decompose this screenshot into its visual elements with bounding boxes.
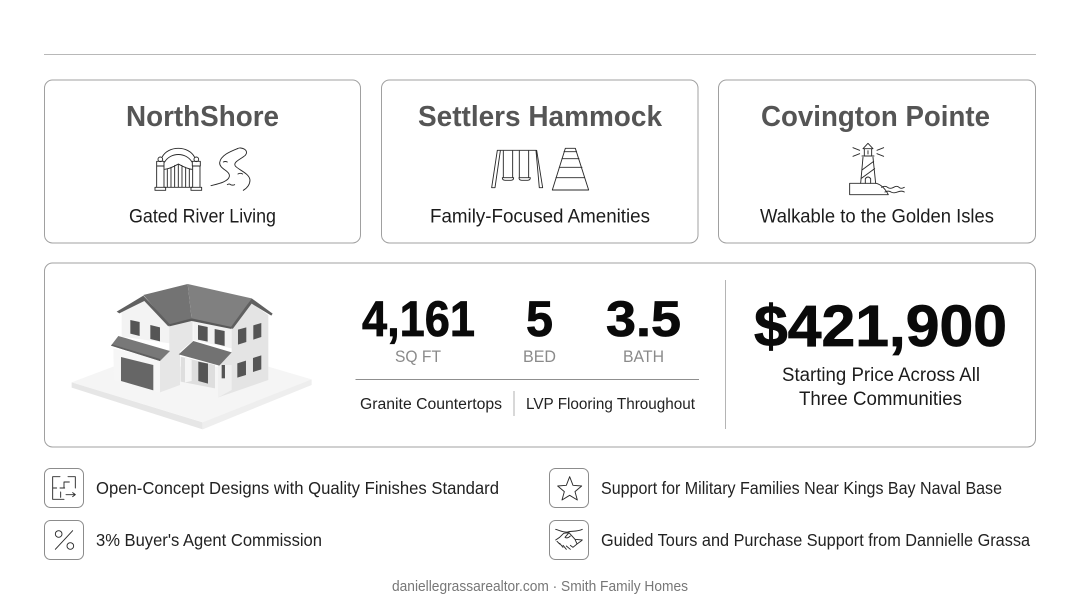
icon: handshake bbox=[556, 529, 582, 549]
heading: Covington Pointe: Covington Pointe bbox=[761, 101, 990, 133]
list item: guided tours bbox=[550, 520, 1030, 560]
heading: NorthShore: NorthShore bbox=[126, 101, 279, 133]
stat: square feet bbox=[362, 291, 475, 366]
house windows and doors bbox=[121, 320, 261, 390]
stat: bedrooms: 5 bbox=[526, 291, 553, 347]
stat: square feet: 4,161 bbox=[362, 291, 475, 347]
list item: military support bbox=[550, 468, 1002, 508]
list item: commission bbox=[44, 520, 322, 560]
label: Walkable to the Golden Isles: Walkable to the Golden Isles bbox=[760, 206, 994, 228]
list item: open concept bbox=[44, 468, 499, 508]
price caption bbox=[782, 365, 980, 410]
list item: guided tours: Guided Tours and Purchase Support from Dannielle Grassa bbox=[601, 530, 1030, 550]
panel: home details bbox=[44, 263, 1036, 447]
stat: bathrooms: 3.5 bbox=[606, 291, 681, 347]
stat: bathrooms bbox=[606, 291, 681, 366]
stat: bathrooms: BATH bbox=[623, 347, 664, 366]
stat: bedrooms bbox=[523, 291, 556, 366]
icon: percent bbox=[55, 531, 74, 549]
panel: Covington Pointe bbox=[718, 80, 1036, 243]
icon: lighthouse bbox=[850, 143, 904, 195]
list item: military support: Support for Military Families Near Kings Bay Naval Base bbox=[601, 478, 1002, 498]
price caption: Starting Price Across All bbox=[782, 365, 980, 386]
stat: bedrooms: BED bbox=[523, 347, 556, 366]
icon: star bbox=[558, 477, 582, 500]
panel: NorthShore bbox=[44, 80, 360, 243]
price: $421,900 bbox=[754, 294, 1007, 359]
icon: gate bbox=[155, 148, 202, 190]
heading: Settlers Hammock: Settlers Hammock bbox=[418, 101, 663, 133]
label: Gated River Living: Gated River Living bbox=[129, 206, 276, 228]
list item: commission: 3% Buyer's Agent Commission bbox=[96, 530, 322, 550]
icon: river bbox=[211, 148, 250, 190]
house body bbox=[113, 300, 268, 397]
icon: floor plan bbox=[53, 477, 75, 499]
icon: swing set bbox=[492, 150, 543, 188]
icon: slide tower bbox=[552, 148, 589, 190]
price caption: Three Communities bbox=[799, 389, 962, 410]
illustration: 3D house bbox=[72, 284, 312, 429]
panel: Settlers Hammock bbox=[382, 80, 698, 243]
list item: open concept: Open-Concept Designs with Quality Finishes Standard bbox=[96, 478, 499, 498]
stat: square feet: SQ FT bbox=[395, 347, 441, 366]
label: Family-Focused Amenities: Family-Focused Amenities bbox=[430, 206, 650, 228]
footer: daniellegrassarealtor.com · Smith Family Homes bbox=[392, 579, 688, 595]
feature: LVP flooring: LVP Flooring Throughout bbox=[526, 396, 696, 413]
feature: granite countertops: Granite Countertops bbox=[360, 396, 502, 413]
house roof bbox=[111, 284, 273, 366]
house base bbox=[72, 367, 312, 429]
